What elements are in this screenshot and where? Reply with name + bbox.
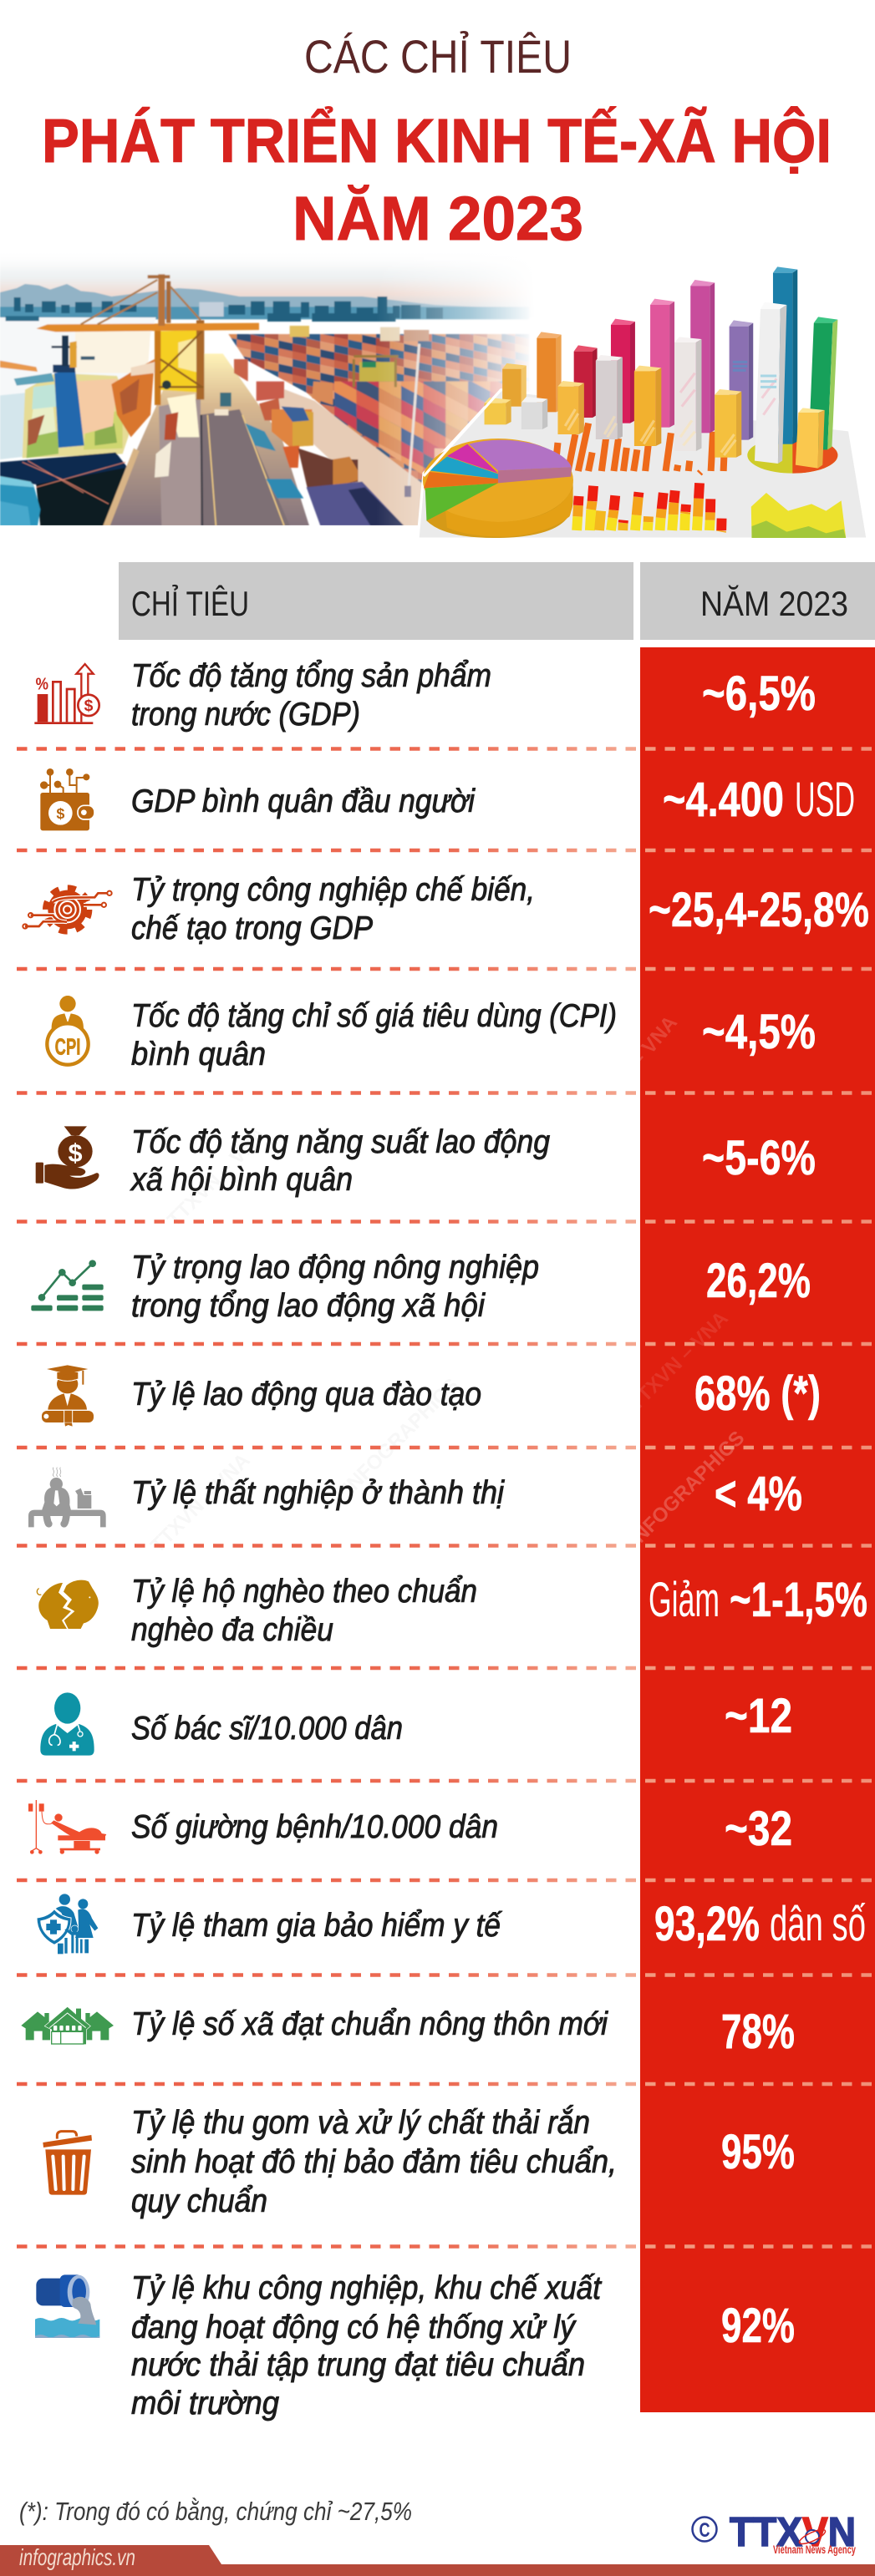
footnote: (*): Trong đó có bằng, chứng chỉ ~27,5% — [19, 2497, 412, 2526]
watermarks: TTXVN – VNA — [163, 1123, 272, 1231]
value: 93,2% — [654, 1897, 760, 1951]
label: Tốc độ tăng tổng sản phẩm — [131, 658, 491, 694]
label: Tốc độ tăng chỉ số giá tiêu dùng (CPI) — [131, 998, 617, 1034]
label: chế tạo trong GDP — [131, 910, 373, 946]
icon: CPI person — [47, 996, 89, 1065]
copyright mark: C — [699, 2519, 710, 2542]
value: ~5-6% — [702, 1131, 816, 1185]
row: wastewater — [35, 2270, 795, 2421]
source url: infographics.vn — [19, 2544, 135, 2570]
row: GDP per capita — [40, 768, 855, 830]
header cell: CHỈ TIÊU: CHỈ TIÊU — [131, 583, 249, 623]
label — [131, 998, 617, 1072]
icon: patient on hospital bed — [28, 1800, 106, 1854]
watermarks — [146, 1012, 749, 1557]
icon: gear with circuits — [23, 888, 112, 931]
label — [131, 1250, 539, 1324]
header cell: CHỈ TIÊU — [119, 562, 633, 640]
quay and road — [103, 353, 309, 525]
header cell: NĂM 2023 — [640, 562, 875, 640]
value: Giảm — [649, 1573, 720, 1627]
icon: bars with percent and dollar: % — [36, 675, 48, 694]
value: 68% (*) — [694, 1367, 821, 1421]
icon: graduate with diploma — [42, 1365, 94, 1427]
watermarks: TTXVN – VNA — [624, 1307, 733, 1415]
row: health insurance — [37, 1894, 866, 1954]
label: Tỷ lệ tham gia bảo hiểm y tế — [131, 1908, 502, 1944]
label: Số bác sĩ/10.000 dân — [131, 1711, 403, 1747]
row: agricultural labour share — [31, 1250, 811, 1324]
label: môi trường — [131, 2386, 279, 2421]
red value column — [640, 647, 875, 2412]
icon: family with shield — [37, 1894, 98, 1954]
value: ~6,5% — [702, 667, 816, 721]
label: Tỷ trọng công nghiệp chế biến, — [131, 872, 535, 908]
icon: bars with percent and dollar — [34, 664, 99, 724]
label: Tỷ lệ lao động qua đào tạo — [131, 1377, 481, 1412]
row: CPI — [47, 996, 816, 1072]
label: xã hội bình quân — [130, 1162, 353, 1198]
value: 95% — [721, 2125, 795, 2179]
label — [130, 1124, 550, 1198]
label: Tỷ lệ số xã đạt chuẩn nông thôn mới — [131, 2006, 608, 2042]
icon: doctor — [40, 1692, 94, 1756]
far container yard — [228, 334, 529, 525]
row: urban unemployment — [28, 1467, 802, 1527]
value: ~12 — [725, 1689, 792, 1743]
label: Tỷ lệ hộ nghèo theo chuẩn — [131, 1574, 477, 1610]
icon: green line chart with stacks — [31, 1260, 104, 1311]
watermarks: TTXVN – VNA — [581, 1012, 682, 1126]
label: Tốc độ tăng năng suất lao động — [131, 1124, 550, 1160]
label: đang hoạt động có hệ thống xử lý — [131, 2310, 577, 2345]
label: Tỷ lệ thu gom và xử lý chất thải rắn — [131, 2105, 590, 2141]
label — [131, 872, 535, 946]
label: nghèo đa chiều — [131, 1612, 333, 1648]
row: GDP growth — [34, 658, 816, 733]
footer band — [0, 2544, 875, 2576]
row: labour productivity — [36, 1124, 816, 1198]
value — [649, 1573, 867, 1627]
icon: wallet with circuits: $ — [56, 805, 64, 822]
icon: bars with percent and dollar: $ — [84, 697, 94, 715]
value: ~32 — [725, 1802, 792, 1856]
label: Số giường bệnh/10.000 dân — [131, 1809, 498, 1845]
label: GDP bình quân đầu người — [131, 783, 476, 819]
icon: CPI person: CPI — [55, 1033, 80, 1059]
icon: money bag on hand — [36, 1126, 99, 1189]
row: hospital beds — [28, 1800, 792, 1856]
icon: discharge pipe over water — [35, 2274, 99, 2338]
label — [131, 2105, 617, 2219]
logo: TTXVN — [692, 2510, 856, 2556]
icon: wallet with circuits — [40, 768, 94, 830]
value: 26,2% — [706, 1254, 811, 1308]
port photo — [0, 251, 535, 525]
title line: NĂM 2023: NĂM 2023 — [293, 184, 583, 253]
value: < 4% — [715, 1467, 802, 1521]
label — [131, 1574, 477, 1648]
3D bar and pie charts — [418, 266, 867, 539]
watermarks: INFOGRAPHICS — [338, 1374, 463, 1498]
row: poverty — [37, 1573, 867, 1648]
globe — [797, 2527, 827, 2547]
title — [42, 30, 832, 253]
watermarks: INFOGRAPHICS — [624, 1427, 749, 1551]
icon: broken piggy bank — [37, 1580, 99, 1629]
icon: green houses — [21, 2006, 114, 2045]
row: manufacturing share — [23, 872, 869, 946]
copyright mark — [692, 2518, 717, 2542]
value: ~4.400 — [663, 773, 784, 827]
value: 78% — [721, 2005, 795, 2059]
icon: trash bin — [43, 2132, 92, 2195]
label: quy chuẩn — [131, 2183, 267, 2219]
crane — [159, 330, 201, 393]
label: trong nước (GDP) — [131, 697, 360, 733]
table header — [119, 562, 875, 640]
label — [131, 658, 491, 733]
label: Tỷ lệ khu công nghiệp, khu chế xuất — [131, 2270, 603, 2306]
value — [654, 1897, 866, 1951]
watermarks: TTXVN – VNA — [146, 1449, 255, 1557]
photo fade to white — [0, 249, 875, 271]
row: solid waste — [43, 2105, 795, 2219]
ship — [23, 373, 134, 458]
header cell: NĂM 2023: NĂM 2023 — [700, 584, 848, 623]
label — [131, 2270, 603, 2421]
value: ~4,5% — [702, 1005, 816, 1059]
icon: money bag on hand: $ — [68, 1138, 83, 1167]
label: sinh hoạt đô thị bảo đảm tiêu chuẩn, — [131, 2144, 617, 2180]
row: doctors — [40, 1689, 792, 1756]
hero illustration: port and charts — [0, 249, 875, 542]
row: trained labour — [42, 1365, 821, 1427]
value: 92% — [721, 2299, 795, 2353]
label: Tỷ lệ thất nghiệp ở thành thị — [131, 1475, 505, 1511]
label: bình quân — [131, 1037, 266, 1072]
label: nước thải tập trung đạt tiêu chuẩn — [131, 2347, 585, 2383]
icon: dejected person on bench — [28, 1468, 106, 1527]
label: trong tổng lao động xã hội — [131, 1288, 486, 1324]
row: new rural communes — [21, 2005, 795, 2059]
wordmark: TTXVN — [730, 2510, 856, 2555]
label: Tỷ trọng lao động nông nghiệp — [131, 1250, 539, 1285]
title line: CÁC CHỈ TIÊU: CÁC CHỈ TIÊU — [304, 30, 572, 83]
near containers — [234, 359, 248, 382]
